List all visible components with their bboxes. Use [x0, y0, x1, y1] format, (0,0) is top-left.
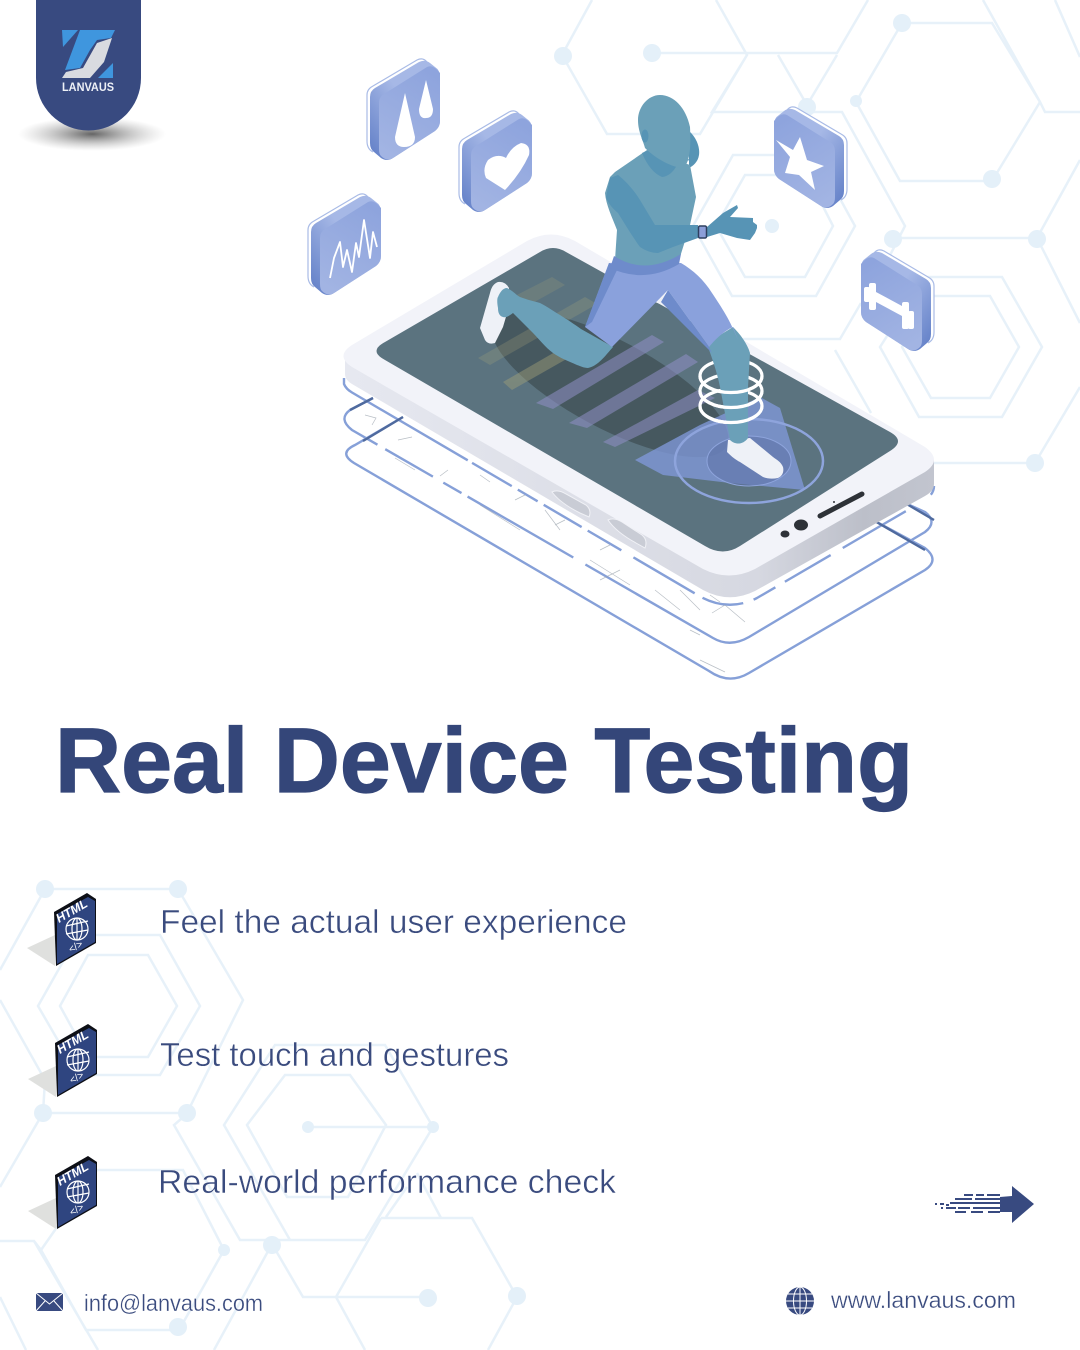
watch	[698, 226, 706, 238]
bullet 2	[28, 1024, 509, 1097]
screen bars	[478, 277, 715, 447]
bullet text: Real-world performance check	[158, 1163, 617, 1200]
front shin	[708, 327, 750, 444]
icon: html file: HTML	[54, 1027, 91, 1057]
icon: drops tile	[367, 59, 440, 160]
side button 2	[608, 519, 646, 548]
icon: pulse tile	[308, 194, 381, 295]
back shoe	[480, 282, 509, 344]
phone screen	[376, 248, 898, 552]
wireframe layers under phone	[344, 378, 934, 679]
icon: envelope	[36, 1293, 63, 1311]
dark accent lines	[350, 398, 934, 550]
neck shade	[642, 145, 690, 177]
bullet 1	[27, 893, 627, 966]
icon: dumbbell tile	[861, 250, 934, 351]
target rings	[675, 419, 823, 503]
runner	[480, 95, 783, 479]
hair bun	[689, 131, 699, 168]
waistband	[610, 254, 681, 275]
drops glyph	[395, 80, 433, 147]
website text: www.lanvaus.com	[830, 1287, 1016, 1313]
dumbbell glyph	[864, 283, 914, 329]
logo wordmark: LANVAUS	[62, 82, 114, 94]
hand	[707, 205, 757, 240]
thin tick marks	[365, 415, 745, 672]
icon: html file	[27, 893, 96, 966]
icon: html file: </>	[68, 1202, 86, 1219]
icon: html file	[28, 1024, 97, 1097]
icon: html file	[28, 1156, 97, 1229]
heart glyph	[484, 143, 529, 190]
bullet text: Feel the actual user experience	[160, 903, 627, 940]
torso	[605, 150, 696, 268]
thigh	[585, 263, 738, 347]
icon: star tile	[774, 107, 847, 208]
icon: globe	[786, 1287, 814, 1315]
phone	[344, 234, 934, 597]
ear	[642, 130, 648, 142]
side button 1	[552, 491, 590, 517]
icon: html file: HTML	[54, 896, 90, 926]
title: Real Device Testing	[55, 710, 913, 812]
bullet 3	[28, 1156, 617, 1229]
footer website	[786, 1287, 1016, 1315]
purple bars	[536, 335, 715, 447]
layer 1 dashed outline	[344, 378, 934, 605]
back rings	[700, 360, 762, 422]
pulse glyph	[330, 220, 377, 278]
email text: info@lanvaus.com	[84, 1290, 263, 1316]
layer 3 outline	[346, 417, 932, 679]
icon: html file: </>	[67, 939, 85, 956]
footer email	[36, 1290, 263, 1316]
logo mark	[62, 30, 115, 78]
layer 2 outline	[344, 398, 932, 643]
leg shading	[585, 263, 712, 353]
phone top face	[344, 234, 934, 576]
icon: html file: HTML	[54, 1159, 91, 1189]
yellow bars	[478, 277, 600, 390]
target area	[635, 397, 823, 503]
speaker	[820, 494, 862, 516]
bullet text: Test touch and gestures	[160, 1036, 509, 1073]
phone side	[345, 355, 934, 597]
logo badge	[18, 0, 166, 151]
icon: html file: </>	[68, 1070, 86, 1087]
pointer shape	[635, 397, 805, 490]
star glyph	[776, 137, 824, 190]
front rings	[700, 376, 762, 423]
hexagon network bottom left	[0, 880, 526, 1350]
arm	[606, 175, 698, 253]
back leg	[497, 288, 613, 368]
camera dots	[780, 501, 835, 538]
front shoe	[727, 438, 783, 479]
icon: heart tile	[459, 111, 532, 212]
arrow	[935, 1186, 1034, 1223]
white heel behind thigh	[655, 291, 680, 312]
hexagon network top right	[554, 0, 1080, 472]
runner shadow	[473, 283, 747, 485]
head	[638, 95, 690, 168]
